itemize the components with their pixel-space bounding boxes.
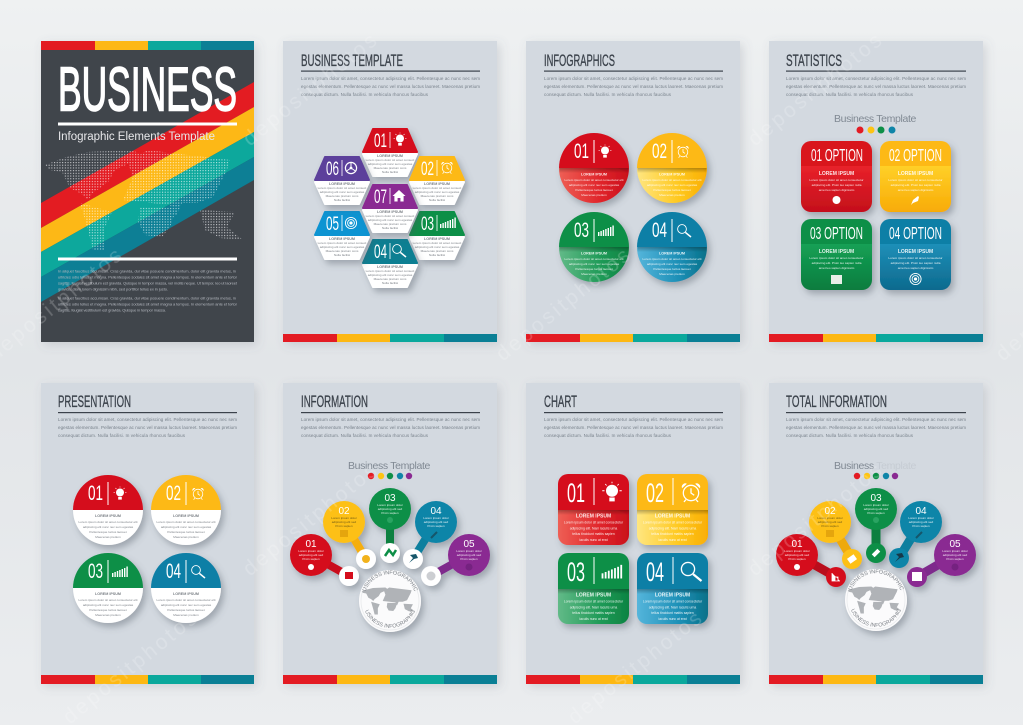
bubble 04: 04	[915, 506, 927, 517]
card 04 option: adipiscing elit. Proin leo sapien nulla	[891, 261, 941, 265]
hexagon 02: Lorem ipsum dolor sit amet consect	[413, 186, 462, 190]
circle 03: LOREM IPSUM	[581, 252, 607, 256]
intro text: consequat dictum. Nulla facilisi. In vehicula rhoncus faucibus	[544, 92, 672, 97]
bubble 02: Proin sapien	[821, 524, 839, 528]
circle 01: adipiscing elit nunc nec sem egestas	[83, 525, 134, 529]
card 04: tellus tincidunt mattis sapien	[651, 611, 694, 615]
card 03 option: amet leo sapien dignissim	[819, 266, 855, 270]
card 03 option: LOREM IPSUM	[819, 249, 854, 255]
circle 04: Lorem ipsum dolor sit amet consectetur elit	[157, 598, 216, 602]
circle 03: Pellentesque luctus laoreet	[89, 608, 127, 612]
intro text	[786, 417, 966, 438]
bubble 02: adipiscing elit sed	[332, 520, 356, 524]
colour dots	[854, 473, 898, 479]
bubble 01: Lorem ipsum dolor	[298, 549, 324, 553]
intro text: egestas elementum. Pellentesque ac nunc vel massa luctus laoreet. Maecenas pretium	[301, 84, 480, 89]
watermark: depositphotos	[492, 244, 634, 366]
intro text: egestas elementum. Pellentesque ac nunc vel massa luctus laoreet. Maecenas pretium	[544, 84, 723, 89]
card 02: tellus tincidunt mattis sapien	[651, 532, 694, 536]
card 03	[558, 553, 629, 624]
hexagon 01: Nulla facilisi	[382, 170, 398, 174]
panel: statistics	[769, 41, 983, 342]
cover subtitle: Infographic Elements Template	[58, 131, 215, 143]
card 02: 02	[646, 478, 664, 508]
card 01 option: 01 OPTION	[811, 145, 863, 165]
bubble 03	[369, 488, 411, 563]
hexagon 01: Lorem ipsum dolor sit amet consect	[366, 158, 415, 162]
card 02 option: amet leo sapien dignissim	[898, 188, 934, 192]
bubble 04: Proin sapien	[912, 524, 930, 528]
hexagon 02: 02	[421, 159, 434, 180]
hexagon 03: 03	[421, 214, 434, 235]
intro text	[786, 76, 966, 97]
hexagon 03	[410, 212, 464, 259]
hexagon 06: LOREM IPSUM	[329, 182, 355, 186]
circle 01: 01	[574, 140, 589, 163]
circle 02: Pellentesque luctus laoreet	[653, 188, 691, 192]
panel: total information	[769, 383, 988, 690]
circle 02: Pellentesque luctus laoreet	[167, 530, 205, 534]
intro text	[301, 417, 480, 438]
hexagon 07: 07	[374, 187, 387, 208]
circle 01: adipiscing elit nunc nec sem egestas	[569, 183, 620, 187]
bubble 03: 03	[870, 493, 882, 504]
circle 04: adipiscing elit nunc nec sem egestas	[161, 603, 212, 607]
card 04: iaculis nunc at erat	[658, 617, 687, 621]
card icon	[832, 196, 840, 204]
circle 04	[637, 212, 707, 282]
hexagon 06: Nulla facilisi	[334, 198, 350, 202]
hexagon 03: adipiscing elit nunc sem egestas	[415, 245, 460, 249]
colour bar	[526, 675, 740, 684]
circle 03: LOREM IPSUM	[95, 592, 121, 596]
card 02: LOREM IPSUM	[655, 514, 690, 520]
intro text: consequat dictum. Nulla facilisi. In vehicula rhoncus faucibus	[786, 92, 914, 97]
sub heading: Business Template	[348, 460, 431, 472]
cover dotted world map	[45, 150, 243, 250]
card 04	[637, 553, 708, 624]
watermark: depositphotos	[239, 459, 381, 581]
card 01: tellus tincidunt mattis sapien	[572, 532, 615, 536]
hexagon 02: adipiscing elit nunc sem egestas	[415, 190, 460, 194]
bubble 05: Lorem ipsum dolor	[456, 549, 482, 553]
card icon	[911, 196, 919, 205]
cover body text: ultricies odio tellus et magna. Pellentesque sodales sit amet magna a tempus. In elementum ante et tortor	[58, 274, 238, 280]
central globe circle	[844, 569, 914, 638]
circle 02: LOREM IPSUM	[659, 172, 685, 176]
hexagon 07: Nulla facilisi	[382, 226, 398, 230]
cover body text: ultricies odio tellus et magna. Pellentesque sodales sit amet magna a tempus. In elementum ante et tortor	[58, 302, 238, 306]
circle 04: Pellentesque luctus laoreet	[167, 608, 205, 612]
bubble 05: 05	[949, 539, 961, 550]
intro text: consequat dictum. Nulla facilisi. In vehicula rhoncus faucibus	[786, 433, 914, 438]
card icon	[910, 273, 921, 285]
circle 02: adipiscing elit nunc nec sem egestas	[161, 525, 212, 529]
intro text: consequat dictum. Nulla facilisi. In vehicula rhoncus faucibus	[544, 433, 672, 438]
panel: chart	[526, 383, 740, 684]
bubble 03	[855, 488, 897, 563]
card 04 option: Lorem ipsum dolor sit amet consectetur	[888, 256, 943, 260]
circle 02: Maecenas pretium	[173, 535, 199, 539]
hexagon 03: Nulla facilisi	[429, 253, 445, 257]
bubble 04	[403, 501, 457, 569]
card 03: tellus tincidunt mattis sapien	[572, 611, 615, 615]
card 04: Lorem ipsum dolor sit amet consectetur	[643, 600, 703, 604]
bubble 02: Proin sapien	[335, 524, 353, 528]
heading: BUSINESS TEMPLATE	[301, 51, 403, 70]
cover lower rule	[58, 258, 237, 260]
hexagon 02: Nulla facilisi	[429, 198, 445, 202]
heading: STATISTICS	[786, 51, 842, 70]
bubble 05: 05	[463, 539, 475, 550]
circle 04: Maecenas pretium	[659, 272, 685, 276]
intro text: Lorem ipsum dolor sit amet, consectetur adipiscing elit. Pellentesque ac nunc nec sem	[58, 417, 237, 422]
panel: presentation	[41, 383, 254, 684]
intro text: consequat dictum. Nulla facilisi. In vehicula rhoncus faucibus	[301, 433, 429, 438]
card 03: LOREM IPSUM	[576, 592, 611, 598]
card 04: LOREM IPSUM	[655, 592, 690, 598]
panel: cover	[41, 41, 254, 342]
circle 02: LOREM IPSUM	[173, 514, 199, 518]
circle 01: Pellentesque luctus laoreet	[89, 530, 127, 534]
circle 02: Maecenas pretium	[659, 193, 685, 197]
intro text: egestas elementum. Pellentesque ac nunc vel massa luctus laoreet. Maecenas pretium	[786, 425, 966, 430]
colour bar	[526, 334, 740, 342]
circle 03	[559, 212, 629, 282]
intro text: Lorem ipsum dolor sit amet, consectetur adipiscing elit. Pellentesque ac nunc nec sem	[301, 76, 480, 81]
circle 04: LOREM IPSUM	[659, 252, 685, 256]
card 02: adipiscing elit. Nam iaculis urna	[649, 526, 696, 530]
central globe circle: BUSINESS INFOGRAPHICS	[362, 570, 418, 592]
card 01: 01	[567, 478, 585, 508]
circle 02: Lorem ipsum dolor sit amet consectetur elit	[157, 520, 216, 524]
hexagon 07: Maecenas pretium cons	[374, 222, 407, 226]
bubble 04: Proin sapien	[427, 524, 445, 528]
cover diagonal stripes	[41, 82, 254, 302]
intro text: consequat dictum. Nulla facilisi. In vehicula rhoncus faucibus	[58, 433, 186, 438]
hexagon 03: Maecenas pretium cons	[421, 249, 454, 253]
circle 01: Lorem ipsum dolor sit amet consectetur elit	[79, 520, 138, 524]
bubble 02: 02	[338, 506, 350, 517]
intro text: egestas elementum. Pellentesque ac nunc vel massa luctus laoreet. Maecenas pretium	[544, 425, 723, 430]
cover body text: gravida, diam lorem dignissim nibh, sed porttitor tellus ex in justo.	[58, 286, 168, 292]
intro text	[544, 76, 723, 97]
bubble 02	[809, 501, 862, 569]
hexagon 06: adipiscing elit nunc sem egestas	[320, 190, 365, 194]
watermark: depositphotos	[744, 459, 886, 581]
bubble 05: Proin sapien	[946, 557, 964, 561]
bubble 03: adipiscing elit sed	[378, 507, 402, 511]
circle 01: Maecenas pretium	[95, 535, 121, 539]
bubble 03: Lorem ipsum dolor	[863, 503, 889, 507]
card 02 option: 02 OPTION	[889, 145, 942, 165]
intro text	[301, 76, 480, 97]
card 01 option: adipiscing elit. Proin leo sapien nulla	[812, 183, 862, 187]
circle 01	[73, 475, 143, 545]
circle 02	[151, 475, 221, 545]
bubble 05: adipiscing elit sed	[943, 553, 967, 557]
hexagon 04: Maecenas pretium cons	[374, 277, 407, 281]
circle 01: LOREM IPSUM	[95, 514, 121, 518]
bubble 01	[776, 534, 846, 587]
card 01 option	[801, 141, 872, 212]
colour bar	[769, 334, 983, 342]
bubble 01: 01	[305, 539, 317, 550]
colour bar	[283, 675, 497, 684]
watermark: depositphotos	[744, 29, 886, 151]
hexagon 05: adipiscing elit nunc sem egestas	[320, 245, 365, 249]
panel: business template	[283, 41, 497, 342]
hexagon 02	[410, 157, 464, 204]
hexagon 01: Maecenas pretium cons	[374, 166, 407, 170]
circle 03: 03	[88, 560, 103, 583]
cover body text	[58, 268, 238, 312]
bubble 05: adipiscing elit sed	[457, 553, 481, 557]
circle 04: 04	[166, 560, 181, 583]
card 02: Lorem ipsum dolor sit amet consectetur	[643, 520, 703, 524]
circle 02: Lorem ipsum dolor sit amet consectetur elit	[643, 178, 702, 182]
bubble 05: Lorem ipsum dolor	[942, 549, 968, 553]
cover title rule	[58, 122, 237, 126]
hexagon 02: LOREM IPSUM	[424, 182, 450, 186]
circle 02: 02	[652, 140, 667, 163]
bubble 05	[421, 534, 490, 586]
intro text: Lorem ipsum dolor sit amet, consectetur adipiscing elit. Pellentesque ac nunc nec sem	[544, 76, 723, 81]
bubble 02: adipiscing elit sed	[818, 520, 842, 524]
hexagon 04: LOREM IPSUM	[377, 265, 403, 269]
bubble 02: Lorem ipsum dolor	[817, 516, 843, 520]
circle 03: Maecenas pretium	[581, 272, 607, 276]
bubble 02: Lorem ipsum dolor	[331, 516, 357, 520]
circle 03: Pellentesque luctus laoreet	[575, 267, 613, 271]
circle 04: Pellentesque luctus laoreet	[653, 267, 691, 271]
bubble 03: Proin sapien	[381, 511, 399, 515]
card 02	[637, 474, 708, 545]
watermark: depositphotos	[239, 29, 381, 151]
intro text: egestas elementum. Pellentesque ac nunc vel massa luctus laoreet. Maecenas pretium	[786, 84, 966, 89]
bubble 04	[889, 501, 942, 568]
bubble 01	[290, 534, 359, 586]
central globe circle: BUSINESS INFOGRAPHICS	[848, 569, 904, 590]
circle 03: 03	[574, 219, 589, 242]
colour bar	[41, 675, 254, 684]
colour dots	[856, 126, 896, 134]
card 03: Lorem ipsum dolor sit amet consectetur	[564, 600, 624, 604]
cover body text: sagittis, feugiat vestibulum est gravida. Quisque in tempor massa, vel mollis neque. Ut tempor, leo ut laoreet	[58, 280, 238, 286]
intro text: Lorem ipsum dolor sit amet, consectetur adipiscing elit. Pellentesque ac nunc nec sem	[301, 417, 480, 422]
heading: INFORMATION	[301, 392, 368, 411]
bubble 05: Proin sapien	[460, 557, 478, 561]
circle 04: LOREM IPSUM	[173, 592, 199, 596]
card 04 option: amet leo sapien dignissim	[898, 266, 934, 270]
bubble 04: Lorem ipsum dolor	[908, 516, 934, 520]
card 03 option: 03 OPTION	[810, 223, 863, 243]
intro text: egestas elementum. Pellentesque ac nunc vel massa luctus laoreet. Maecenas pretium	[301, 425, 480, 430]
hexagon 05	[315, 212, 369, 259]
card 03: adipiscing elit. Nam iaculis urna	[570, 606, 617, 610]
hexagon 06: 06	[326, 159, 339, 180]
circle 01: 01	[88, 482, 103, 505]
hexagon 05: 05	[326, 214, 339, 235]
bubble 01: Proin sapien	[788, 557, 806, 561]
sub heading: Business Template	[834, 460, 917, 472]
circle 03: Lorem ipsum dolor sit amet consectetur elit	[565, 257, 624, 261]
circle 03: adipiscing elit nunc nec sem egestas	[569, 262, 620, 266]
hexagon 04: adipiscing elit nunc sem egestas	[368, 273, 413, 277]
cover top colour bar	[41, 41, 254, 50]
bubble 02: 02	[824, 506, 836, 517]
card 03: iaculis nunc at erat	[579, 617, 608, 621]
cover title: BUSINESS	[58, 56, 237, 124]
card 04 option: LOREM IPSUM	[898, 249, 933, 255]
intro text: Lorem ipsum dolor sit amet, consectetur adipiscing elit. Pellentesque ac nunc nec sem	[786, 76, 966, 81]
intro text: consequat dictum. Nulla facilisi. In vehicula rhoncus faucibus	[301, 92, 429, 97]
circle 01: Pellentesque luctus laoreet	[575, 188, 613, 192]
circle 01: Lorem ipsum dolor sit amet consectetur elit	[565, 178, 624, 182]
card 02 option: Lorem ipsum dolor sit amet consectetur	[888, 178, 943, 182]
circle 02: adipiscing elit nunc nec sem egestas	[647, 183, 698, 187]
hexagon 07: adipiscing elit nunc sem egestas	[368, 218, 413, 222]
card 01 option: LOREM IPSUM	[819, 171, 854, 177]
hexagon 02: Maecenas pretium cons	[421, 194, 454, 198]
hexagon 03: Lorem ipsum dolor sit amet consect	[413, 241, 462, 245]
colour bar	[769, 675, 983, 684]
hexagon 01: LOREM IPSUM	[377, 154, 403, 158]
circle 02	[637, 133, 707, 203]
heading: CHART	[544, 392, 577, 411]
bubble 01: 01	[791, 539, 803, 550]
circle 04: adipiscing elit nunc nec sem egestas	[647, 262, 698, 266]
circle 04: Lorem ipsum dolor sit amet consectetur elit	[643, 257, 702, 261]
card 03: 03	[567, 557, 585, 587]
bubble 04: adipiscing elit sed	[424, 520, 448, 524]
card 02: iaculis nunc at erat	[658, 538, 687, 542]
hexagon 04	[363, 240, 417, 287]
circle 03: Lorem ipsum dolor sit amet consectetur elit	[79, 598, 138, 602]
heading: TOTAL INFORMATION	[786, 392, 887, 411]
sub heading: Business Template	[834, 113, 917, 125]
card 01	[558, 474, 629, 545]
bubble 03: Proin sapien	[867, 511, 885, 515]
bubble 03: adipiscing elit sed	[864, 507, 888, 511]
hexagon 06: Lorem ipsum dolor sit amet consect	[318, 186, 367, 190]
central globe circle: BUSINESS INFOGRAPHICS	[852, 608, 900, 627]
circle 01	[559, 133, 629, 203]
heading: INFOGRAPHICS	[544, 51, 615, 70]
panel: infographics	[526, 41, 740, 342]
card 04: 04	[646, 557, 664, 587]
card 04: adipiscing elit. Nam iaculis urna	[649, 606, 696, 610]
central globe circle	[358, 570, 428, 640]
card 01: Lorem ipsum dolor sit amet consectetur	[564, 520, 624, 524]
panel: information	[283, 383, 502, 690]
hexagon 01: 01	[374, 131, 387, 152]
intro text: egestas elementum. Pellentesque ac nunc vel massa luctus laoreet. Maecenas pretium	[58, 425, 237, 430]
intro text	[544, 417, 723, 438]
card 01 option: amet leo sapien dignissim	[819, 188, 855, 192]
card 02 option	[880, 141, 951, 212]
hexagon 04: Lorem ipsum dolor sit amet consect	[366, 269, 415, 273]
hexagon 05: Lorem ipsum dolor sit amet consect	[318, 241, 367, 245]
hexagon 07: LOREM IPSUM	[377, 210, 403, 214]
card 04 option	[880, 219, 951, 290]
hexagon 05: Nulla facilisi	[334, 253, 350, 257]
bubble 03: Lorem ipsum dolor	[377, 503, 403, 507]
circle 03: Maecenas pretium	[95, 613, 121, 617]
hexagon 07: Lorem ipsum dolor sit amet consect	[366, 214, 415, 218]
central globe circle: BUSINESS INFOGRAPHICS	[366, 610, 414, 628]
colour dots	[368, 473, 412, 479]
circle 04: Maecenas pretium	[173, 613, 199, 617]
bubble 03: 03	[384, 493, 396, 504]
card 02 option: LOREM IPSUM	[898, 171, 933, 177]
intro text: Lorem ipsum dolor sit amet, consectetur adipiscing elit. Pellentesque ac nunc nec sem	[544, 417, 723, 422]
card 01: LOREM IPSUM	[576, 514, 611, 520]
card 04 option: 04 OPTION	[889, 223, 942, 243]
heading: PRESENTATION	[58, 392, 131, 411]
hexagon 04: 04	[374, 242, 387, 263]
hexagon 06	[315, 157, 369, 204]
bubble 02	[323, 501, 376, 569]
circle 04	[151, 553, 221, 623]
card 03 option	[801, 219, 872, 290]
intro text	[58, 417, 237, 438]
circle 03: adipiscing elit nunc nec sem egestas	[83, 603, 134, 607]
card icon	[831, 275, 842, 284]
bubble 04: 04	[430, 506, 442, 517]
bubble 01: adipiscing elit sed	[299, 553, 323, 557]
card 01 option: Lorem ipsum dolor sit amet consectetur	[809, 178, 864, 182]
bubble 01: Proin sapien	[302, 557, 320, 561]
bubble 04: adipiscing elit sed	[909, 520, 933, 524]
card 03 option: Lorem ipsum dolor sit amet consectetur	[809, 256, 864, 260]
card 01: adipiscing elit. Nam iaculis urna	[570, 526, 617, 530]
hexagon 07	[363, 185, 417, 232]
hexagon 03: LOREM IPSUM	[424, 237, 450, 241]
bubble 01: Lorem ipsum dolor	[784, 549, 810, 553]
hexagon 06: Maecenas pretium cons	[326, 194, 359, 198]
bubble 04: Lorem ipsum dolor	[423, 516, 449, 520]
bubble 05	[907, 534, 976, 587]
hexagon 01	[363, 129, 417, 176]
intro text: Lorem ipsum dolor sit amet, consectetur adipiscing elit. Pellentesque ac nunc nec sem	[786, 417, 966, 422]
hexagon 05: LOREM IPSUM	[329, 237, 355, 241]
card 01: iaculis nunc at erat	[579, 538, 608, 542]
hexagon 01: adipiscing elit nunc sem egestas	[368, 162, 413, 166]
hexagon 05: Maecenas pretium cons	[326, 249, 359, 253]
circle 04: 04	[652, 219, 667, 242]
circle 03	[73, 553, 143, 623]
circle 01: Maecenas pretium	[581, 193, 607, 197]
circle 01: LOREM IPSUM	[581, 172, 607, 176]
cover body text: In aliquet faucibus accumsan. Cras gravida, dui vitae posuere condimentum, dolor elit gravida metus, in	[58, 296, 236, 300]
card 02 option: adipiscing elit. Proin leo sapien nulla	[891, 183, 941, 187]
hexagon 04: Nulla facilisi	[382, 281, 398, 285]
cover body text: In aliquet faucibus accumsan. Cras gravida, dui vitae posuere condimentum, dolor elit gravida metus, in	[58, 268, 236, 274]
colour bar	[283, 334, 497, 342]
circle 02: 02	[166, 482, 181, 505]
card 03 option: adipiscing elit. Proin leo sapien nulla	[812, 261, 862, 265]
bubble 01: adipiscing elit sed	[785, 553, 809, 557]
cover body text: sagittis, feugiat vestibulum est gravida. Quisque in tempor massa.	[58, 308, 166, 312]
